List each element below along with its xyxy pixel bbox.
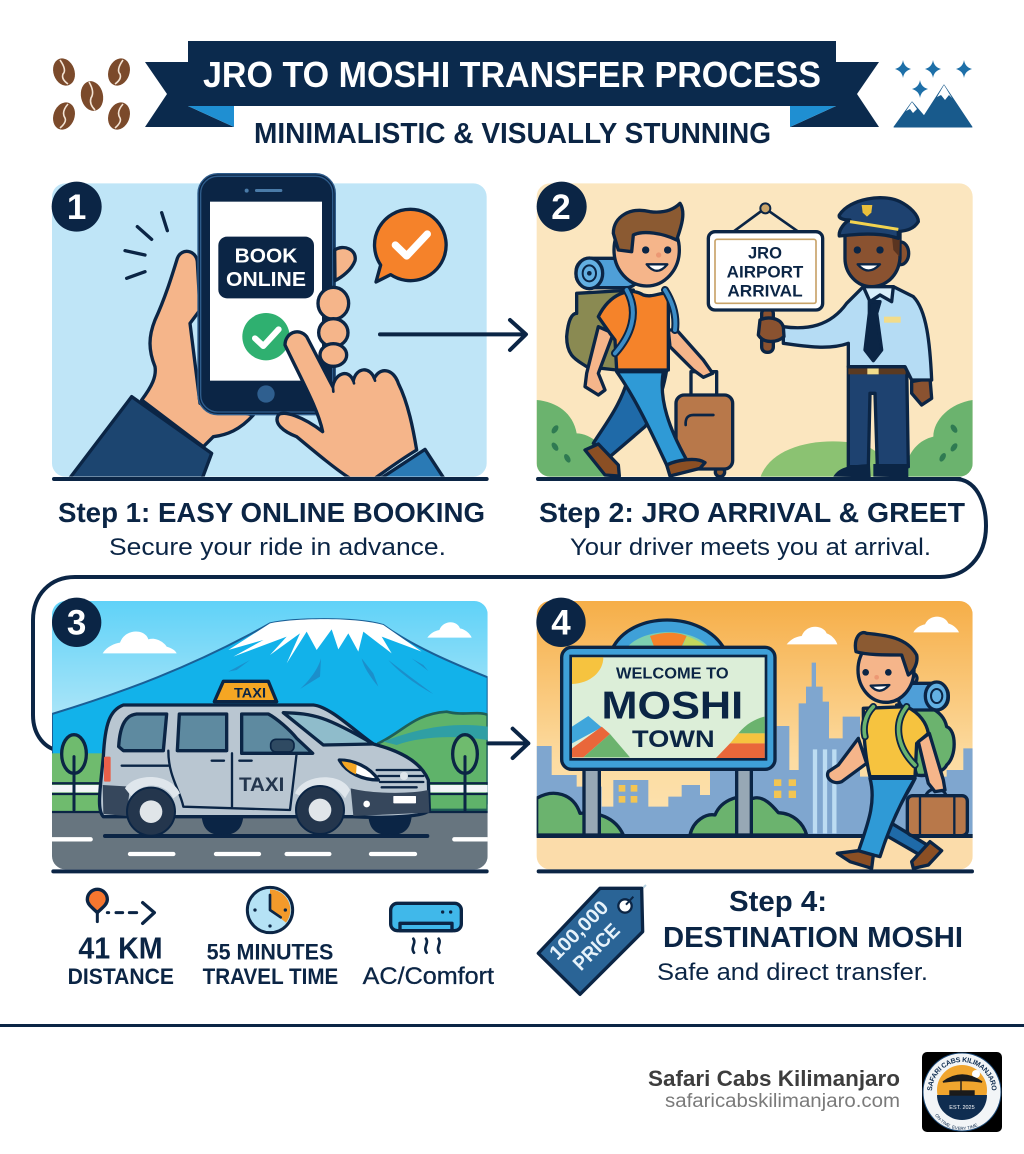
footer rule [0, 1024, 1024, 1027]
arrow to step 4 [488, 729, 528, 758]
ribbon main band [188, 41, 836, 106]
mountain [52, 619, 488, 803]
straps [864, 707, 915, 765]
baseline [54, 473, 487, 485]
panel: step 2 arrival illustration [537, 182, 973, 479]
ribbon left fold [188, 106, 234, 127]
panel 1 background [52, 183, 487, 477]
distance stat [68, 889, 174, 989]
backpack [567, 290, 633, 370]
head [855, 633, 917, 702]
logo badge: SAFARI CABS KILIMANJARO [927, 1057, 997, 1091]
far wheels [202, 817, 412, 835]
hanging airport sign: JRO [748, 243, 782, 262]
gripping fingers [318, 248, 355, 366]
left arm [585, 327, 613, 395]
price value: 100,000 [545, 897, 613, 965]
gripping hand [758, 318, 784, 341]
right tree [453, 735, 477, 810]
bushes [537, 793, 807, 835]
clouds [787, 617, 959, 644]
lane dashes [52, 839, 488, 854]
ribbon right tail [790, 62, 879, 127]
tail light [104, 757, 111, 782]
front leg [858, 778, 915, 857]
rear and front bumper [103, 785, 429, 816]
number badge 1 [52, 182, 102, 232]
time value: 55 MINUTES [207, 939, 333, 964]
shirt and arm [783, 287, 932, 380]
icon: emphasis lines [125, 213, 167, 278]
step 2 caption: Step 2: JRO ARRIVAL & GREET [539, 497, 965, 528]
welcome sign [562, 620, 775, 835]
number badge 3 [52, 598, 101, 647]
pointing hand [277, 332, 417, 478]
number badge 4 [536, 598, 586, 647]
panel: step 4 Moshi illustration [536, 598, 973, 871]
panel: step 3 taxi and Kilimanjaro illustration [52, 598, 528, 871]
skyline [537, 663, 973, 835]
bedroll [576, 258, 639, 289]
panel: step 1 booking illustration [52, 175, 526, 480]
snow cap [228, 619, 422, 663]
step 1 caption: Secure your ride in advance. [109, 534, 446, 561]
step 4 caption [657, 886, 963, 986]
step 4 caption: Safe and direct transfer. [657, 959, 928, 986]
grille [377, 770, 423, 787]
suitcase [907, 789, 967, 836]
hanging airport sign: ARRIVAL [727, 282, 803, 301]
AC comfort stat [363, 903, 494, 990]
free hand [912, 378, 932, 405]
ribbon right fold [790, 106, 836, 127]
logo badge: EST. 2025 [949, 1105, 975, 1111]
baseline [53, 865, 487, 877]
icon: coffee beans [49, 55, 134, 133]
name badge [884, 317, 901, 323]
suitcase [676, 372, 733, 477]
tie [865, 302, 882, 361]
price label: PRICE [569, 920, 625, 975]
right arm [918, 733, 945, 792]
sign arch [612, 620, 725, 653]
step 4 caption: DESTINATION MOSHI [663, 922, 963, 954]
right sleeve [378, 449, 445, 480]
back leg [593, 370, 667, 457]
fence [52, 783, 488, 794]
tower window stripes [815, 749, 834, 833]
head [845, 230, 909, 287]
fog lamp [363, 801, 370, 807]
traveller with backpack [567, 203, 733, 477]
mirror [271, 739, 294, 752]
green ground [52, 753, 102, 811]
icon: orange check speech bubble [375, 209, 446, 282]
travel time stat [203, 887, 338, 989]
roof taxi sign [214, 681, 277, 702]
step 4 caption: Step 4: [729, 886, 827, 918]
welcome sign: MOSHI [601, 685, 743, 728]
sign frame [562, 647, 775, 769]
header banner [145, 41, 879, 150]
mountain shadows [228, 658, 433, 694]
shoulder straps [615, 290, 675, 353]
yellow shirt [863, 707, 928, 777]
phone [199, 175, 334, 413]
icon: stars and mountains [894, 60, 972, 127]
clouds [103, 622, 472, 653]
left tree [62, 735, 86, 810]
connector line between rows [33, 479, 986, 751]
scenery [52, 601, 488, 869]
left hand [142, 251, 253, 447]
subtitle: MINIMALISTIC & VISUALLY STUNNING [254, 118, 771, 150]
hands and phone art [68, 251, 445, 480]
front leg [617, 372, 687, 465]
book online button: BOOK [235, 245, 297, 268]
distance label: DISTANCE [68, 964, 174, 989]
door lines [122, 751, 297, 810]
taxi van [99, 681, 429, 836]
lit windows [619, 779, 796, 803]
cap [839, 198, 918, 238]
logo badge: ON-TIME, EVERY TIME [936, 1114, 978, 1130]
headlight [339, 760, 378, 780]
left sleeve [68, 397, 212, 480]
comfort label: AC/Comfort [363, 963, 494, 990]
welcome sign: TOWN [632, 726, 715, 753]
title: JRO TO MOSHI TRANSFER PROCESS [203, 54, 821, 95]
distance value: 41 KM [78, 930, 163, 965]
time label: TRAVEL TIME [203, 964, 338, 989]
step 2 caption [539, 497, 965, 561]
hills [378, 712, 488, 810]
ground [537, 836, 973, 869]
finger creases [333, 378, 375, 392]
ground line [536, 834, 973, 838]
baseline [538, 473, 960, 485]
roof taxi sign: TAXI [234, 684, 266, 700]
wheels [127, 786, 344, 836]
front shoe [837, 851, 873, 868]
back leg [875, 778, 930, 855]
town scene [537, 601, 973, 869]
van body [99, 705, 429, 817]
right arm [668, 330, 713, 377]
posts [584, 768, 751, 835]
shoes [833, 464, 908, 477]
icon: map pin with dashed arrow [87, 889, 154, 923]
driver in uniform [758, 198, 932, 477]
book online button: ONLINE [226, 268, 306, 291]
road shadow [105, 830, 427, 842]
icon: green check [242, 313, 290, 360]
panel 2 background [537, 183, 973, 477]
step 1 caption: Step 1: EASY ONLINE BOOKING [58, 497, 485, 528]
icon: clock [247, 887, 293, 933]
sign decorations [572, 657, 603, 684]
belt [848, 368, 906, 374]
front shoe [667, 459, 705, 476]
licence plate [393, 796, 416, 803]
sky [52, 601, 488, 713]
windows [119, 714, 167, 751]
sign face [571, 656, 766, 759]
icon: air conditioner [391, 903, 461, 953]
sign text: WELCOME TO [616, 666, 729, 683]
footer brand text: Safari Cabs Kilimanjaro [648, 1066, 900, 1091]
back shoe [912, 842, 942, 868]
ribbon left tail [145, 62, 234, 127]
wheel arches [125, 777, 350, 798]
arrow to step 2 [380, 320, 526, 350]
number badge 3: 3 [67, 604, 86, 643]
baseline [539, 865, 972, 877]
logo badge [922, 1052, 1002, 1132]
bedroll [898, 682, 948, 710]
backpack [897, 704, 954, 775]
number badge 4: 4 [551, 604, 571, 643]
head [613, 203, 683, 286]
left arm [828, 738, 867, 783]
traveller walking to town [828, 633, 967, 868]
trousers [848, 367, 908, 467]
road [52, 812, 488, 869]
price tag [538, 885, 646, 994]
step 1 caption [58, 497, 485, 561]
collar [863, 287, 893, 302]
back shoe [585, 444, 619, 476]
step 2 caption: Your driver meets you at arrival. [570, 534, 931, 561]
footer brand text [648, 1066, 900, 1112]
sky [537, 601, 973, 869]
bushes [537, 400, 973, 478]
door taxi label: TAXI [239, 775, 284, 796]
footer brand text: safaricabskilimanjaro.com [665, 1091, 900, 1112]
orange shirt [598, 292, 668, 370]
number badge 1: 1 [67, 188, 86, 227]
number badge 2: 2 [551, 188, 571, 227]
hanging airport sign [708, 203, 823, 352]
number badge 2 [537, 182, 587, 232]
hanging airport sign: AIRPORT [727, 263, 803, 282]
book online button [218, 237, 314, 298]
